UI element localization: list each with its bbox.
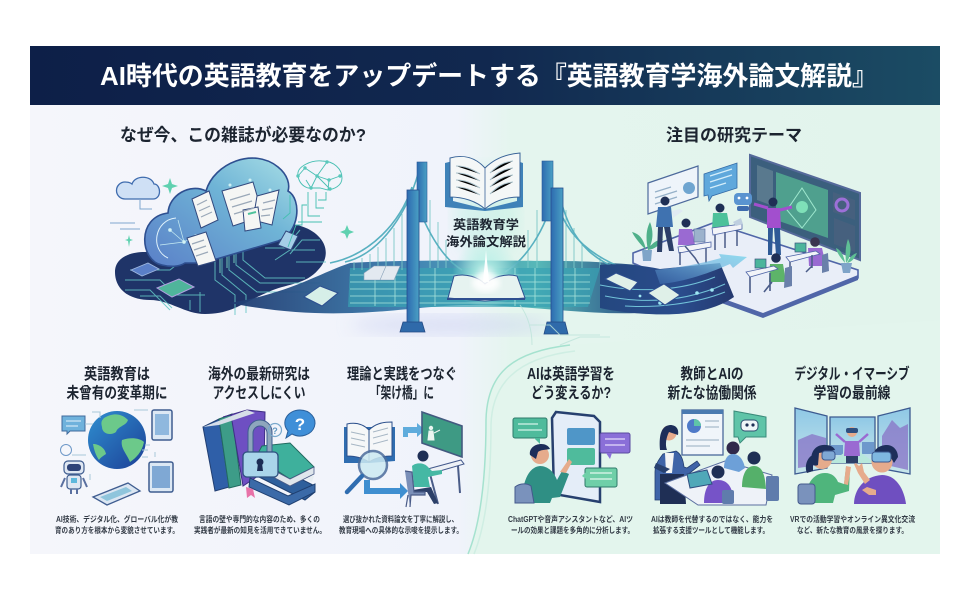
heading: research themes: 注目の研究テーマ [666,126,802,145]
heading: AIは英語学習を [527,364,615,383]
heading [527,364,615,402]
right lower panel with curved divider [468,320,940,554]
deck [348,268,600,307]
heading: 理論と実践をつなぐ [347,365,457,383]
caption: AI技術、デジタル化、グローバル化が教 [56,514,178,524]
heading: どう変えるか? [531,383,611,402]
heading: 英語教育は [84,364,150,383]
caption [508,514,634,535]
main cloud [145,158,297,266]
icon: globe and devices [60,410,173,505]
caption: ChatGPTや音声アシスタントなど、AIツ [508,514,633,524]
heading: アクセスしにくい [212,384,306,402]
caption: 実践者が最新の知見を活用できていません。 [194,525,326,535]
tablets on circuit [131,263,159,276]
icon: teacher and AI collaboration [654,410,779,505]
plant right [836,239,857,273]
panel: column 6 [790,364,915,535]
panel: column 5 [651,364,779,535]
caption: VRでの活動学習やオンライン異文化交流 [790,514,915,524]
cables [330,162,648,278]
floating books on ribbon [304,286,338,306]
floating books [605,273,638,291]
caption [790,514,915,535]
heading [347,365,457,402]
caption: AIは教師を代替するのではなく、能力を [651,514,773,524]
bridge label: 英語教育学 [453,217,519,232]
title: AI時代の英語教育をアップデートする『英語教育学海外論文解説』 [100,61,878,91]
teacher gesturing [754,198,792,255]
suspenders [354,200,610,270]
heading: 新たな協働関係 [668,384,757,402]
speech bubble [704,163,737,201]
caption [651,514,773,535]
heading: 教師とAIの [680,364,744,383]
panel: column 3 [339,365,464,535]
icon: locked books: ? [295,415,305,434]
heading: why this journal: なぜ今、この雑誌が必要なのか? [120,125,366,145]
heading [794,364,910,402]
header band [30,46,940,105]
towers [417,162,427,222]
icon: locked books: ? [272,426,278,436]
caption [55,514,179,535]
icon: locked books [203,410,315,505]
heading: 未曾有の変革期に [66,383,168,402]
bridge label [446,217,527,249]
icon: person with tablet chat [513,412,630,503]
panel: column 4 [508,364,634,535]
caption: など、新たな教育の風景を探ります。 [797,525,908,535]
caption: 育のあり方を根本から変貌させています。 [55,525,179,535]
caption [339,514,463,535]
dark circuit blob [115,223,326,314]
data arrow [655,254,747,284]
caption: 選び抜かれた資料論文を丁寧に解説し、 [343,514,458,524]
caption: 言語の壁や専門的な内容のため、多くの [199,514,320,524]
heading [66,364,168,402]
heading: 「架け橋」に [370,383,434,402]
student right front [746,253,792,293]
seated student [678,218,711,266]
documents [187,182,298,266]
bridge label: 海外論文解説 [446,234,527,249]
heading [668,364,757,402]
caption [194,514,326,535]
illustration: digital cloud and circuits [110,158,354,315]
heading: 海外の最新研究は [208,364,310,383]
data ribbon [230,260,640,313]
circuit traces [125,198,326,315]
illustration: future classroom [600,155,860,318]
side panel [648,166,698,214]
heading: 学習の最前線 [814,383,891,402]
caption: 教育現場への具体的な示唆を提示します。 [339,525,463,535]
small cloud [116,177,160,199]
student at table with laptop [712,204,743,250]
floor platform [633,223,858,315]
panel: column 1 [55,364,179,535]
icon: glowing book on bridge [447,250,525,301]
soft shadow under bridge [350,315,550,335]
data ribbon into classroom [600,263,734,314]
brain network [283,161,342,247]
caption: ールの効果と課題を多角的に分析します。 [511,525,634,535]
glow behind book [454,167,518,263]
caption: 拡張する支援ツールとして機能します。 [653,525,769,535]
student right back [786,237,829,274]
wall screen [750,155,860,260]
heading: デジタル・イマーシブ [794,364,910,383]
panel: column 2 [194,364,326,535]
background panel [30,105,940,554]
illustration: bridge [230,161,648,335]
icon: open book [445,153,523,211]
icon: VR immersive learning [795,408,910,504]
faint circuit decoration [520,305,610,345]
icon: book, magnifier, blackboard [344,412,464,507]
heading [208,364,310,402]
plant left [632,222,663,261]
person standing with tablet [656,196,683,252]
robot [734,193,752,205]
